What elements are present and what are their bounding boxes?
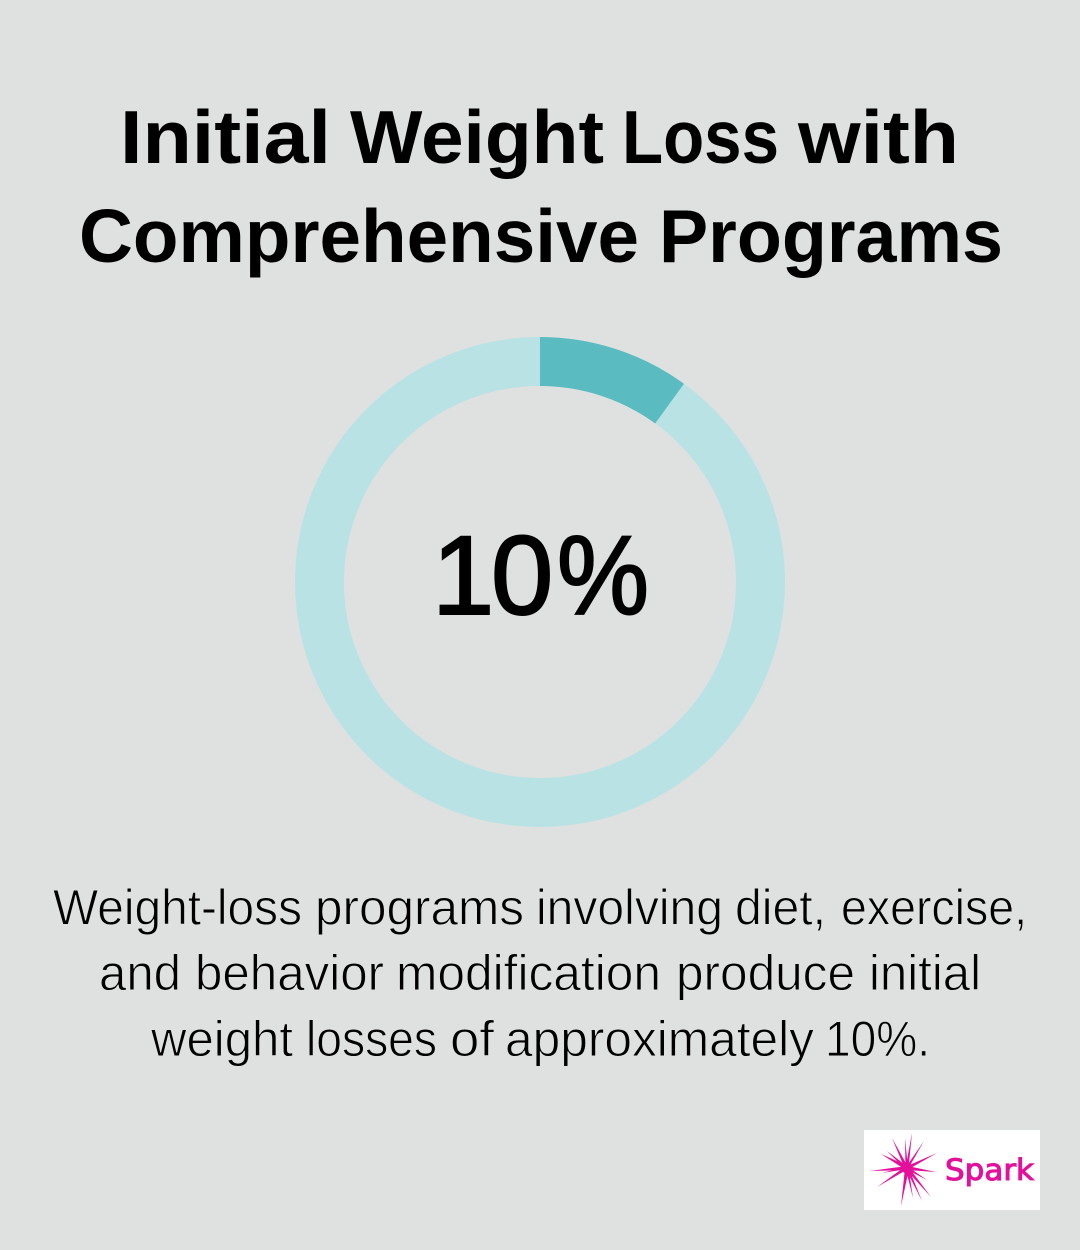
description text: modification bbox=[396, 945, 661, 1001]
donut value: 10 bbox=[432, 513, 553, 638]
icon: starburst bbox=[870, 1133, 937, 1206]
title: Loss bbox=[622, 95, 779, 179]
donut chart bbox=[320, 337, 760, 802]
description text: approximately bbox=[505, 1011, 814, 1067]
title: with bbox=[797, 95, 959, 179]
donut segment: 10% bbox=[540, 337, 684, 423]
title: Initial bbox=[120, 95, 331, 179]
logo wordmark: Spark bbox=[945, 1153, 1034, 1187]
description text: initial bbox=[869, 945, 981, 1001]
donut value: % bbox=[557, 513, 649, 638]
donut track bbox=[320, 362, 760, 802]
description text: 10%. bbox=[825, 1011, 930, 1067]
description text: programs bbox=[315, 880, 524, 936]
description text: produce bbox=[676, 945, 855, 1001]
description text bbox=[53, 880, 1027, 1067]
description text: losses bbox=[306, 1011, 437, 1067]
title bbox=[79, 95, 1003, 278]
description text: diet, bbox=[735, 880, 826, 936]
description text: of bbox=[450, 1011, 494, 1067]
logo: Spark bbox=[864, 1130, 1040, 1210]
donut value bbox=[432, 513, 649, 638]
title: Programs bbox=[659, 194, 1003, 278]
description text: weight bbox=[150, 1011, 293, 1067]
title: Weight bbox=[350, 95, 604, 179]
title: Comprehensive bbox=[79, 194, 639, 278]
description text: behavior bbox=[195, 945, 384, 1001]
description text: and bbox=[99, 945, 181, 1001]
description text: Weight-loss bbox=[53, 880, 302, 936]
logo background bbox=[864, 1130, 1040, 1210]
description text: exercise, bbox=[841, 880, 1027, 936]
description text: involving bbox=[536, 880, 723, 936]
